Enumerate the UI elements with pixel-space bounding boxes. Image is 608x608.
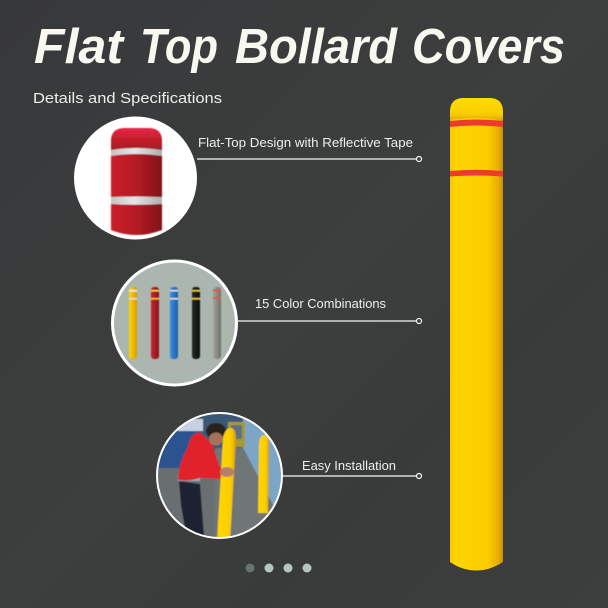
title: Covers [412, 20, 565, 74]
label 3: Easy Installation [302, 459, 396, 473]
title: Bollard [235, 20, 398, 74]
image circle 3: person installing bollard [156, 412, 283, 539]
title [34, 20, 565, 74]
connector line 2 [238, 320, 416, 322]
connector end dot 1 [416, 156, 422, 162]
connector end dot 3 [416, 474, 422, 478]
feature 3: easy installation [150, 410, 422, 545]
title: Top [140, 20, 218, 74]
feature 1: flat-top design [74, 116, 422, 240]
title: Flat [34, 20, 125, 74]
label 1: Flat-Top Design with Reflective Tape [198, 136, 413, 150]
carousel dots [246, 564, 312, 572]
main product: yellow bollard cover [450, 98, 503, 570]
connector line 1 [197, 158, 416, 160]
connector line 3 [283, 475, 416, 477]
image circle 1: red bollard [74, 116, 197, 240]
subtitle: Details and Specifications [33, 90, 222, 107]
feature 2: color combinations [112, 261, 422, 385]
connector end dot 2 [416, 318, 422, 324]
image circle 2: five colored bollards [112, 261, 236, 385]
label 2: 15 Color Combinations [255, 297, 386, 311]
